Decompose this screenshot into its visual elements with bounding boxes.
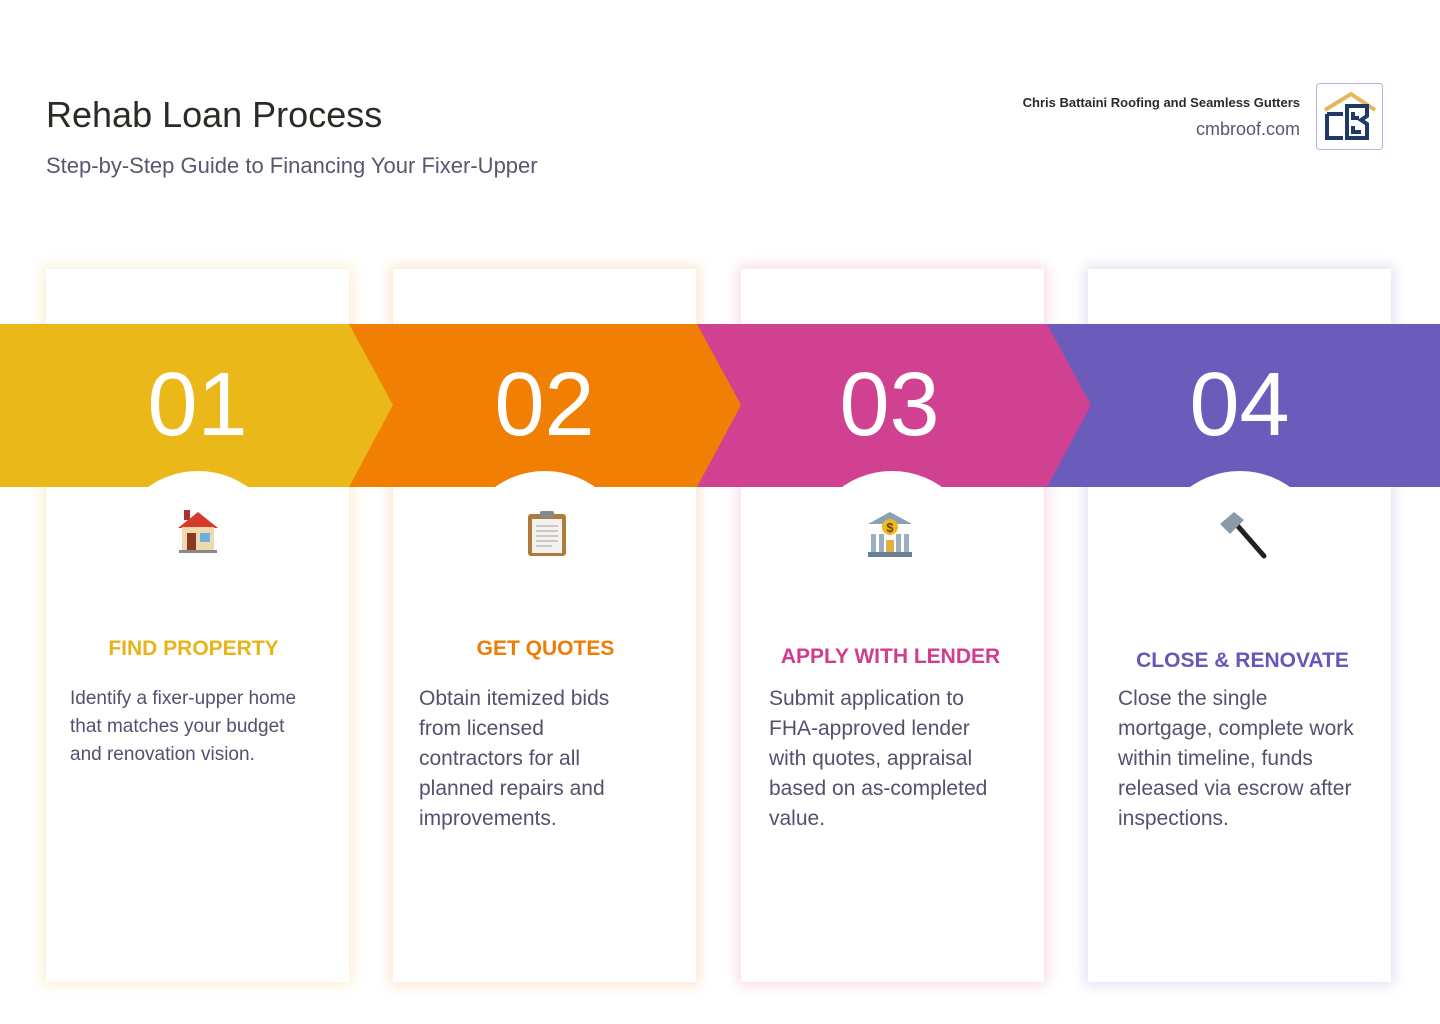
text 2: from licensed (419, 717, 544, 740)
text 1: and renovation vision. (70, 744, 255, 765)
website: cmbroof.com (1196, 119, 1300, 139)
text 2: improvements. (419, 807, 557, 830)
text 3: value. (769, 807, 825, 830)
heading 3: APPLY WITH LENDER (781, 645, 1000, 668)
text 4: within timeline, funds (1118, 747, 1313, 770)
card 2 (393, 269, 696, 982)
text 4 (1118, 687, 1354, 830)
text 3 (769, 687, 987, 830)
white below band covers lower circle halves (46, 487, 349, 567)
text 1: that matches your budget (70, 716, 284, 737)
text 4: Close the single (1118, 687, 1267, 710)
text 3: based on as-completed (769, 777, 987, 800)
heading 1: FIND PROPERTY (108, 637, 279, 660)
circles (112, 471, 284, 643)
text 2 (419, 687, 609, 830)
company name: Chris Battaini Roofing and Seamless Gutters (1023, 95, 1300, 110)
heading 2: GET QUOTES (477, 637, 614, 660)
icon: bank: $ (886, 520, 894, 535)
text 4: inspections. (1118, 807, 1229, 830)
text 2: Obtain itemized bids (419, 687, 609, 710)
icon: hammer (1220, 512, 1266, 558)
text 3: FHA-approved lender (769, 717, 970, 740)
icon: clipboard (528, 511, 566, 556)
subtitle: Step-by-Step Guide to Financing Your Fixer-Upper (46, 153, 538, 178)
text 1 (70, 688, 296, 765)
number 04: 04 (1189, 355, 1290, 455)
number 03: 03 (839, 355, 940, 455)
icon: bank (868, 512, 912, 557)
text 4: released via escrow after (1118, 777, 1351, 800)
text 3: Submit application to (769, 687, 964, 710)
number 01: 01 (147, 355, 248, 455)
text 2: contractors for all (419, 747, 580, 770)
text 2: planned repairs and (419, 777, 605, 800)
title: Rehab Loan Process (46, 94, 382, 135)
text 1: Identify a fixer-upper home (70, 688, 296, 709)
number 02: 02 (494, 355, 595, 455)
logo (1316, 83, 1383, 150)
chevron band (0, 324, 1440, 487)
text 3: with quotes, appraisal (769, 747, 972, 770)
text 4: mortgage, complete work (1118, 717, 1354, 740)
card 1 (46, 269, 349, 982)
heading 4: CLOSE & RENOVATE (1136, 649, 1349, 672)
card 4 (1088, 269, 1391, 982)
card 3 (741, 269, 1044, 982)
icon: house (178, 510, 218, 553)
